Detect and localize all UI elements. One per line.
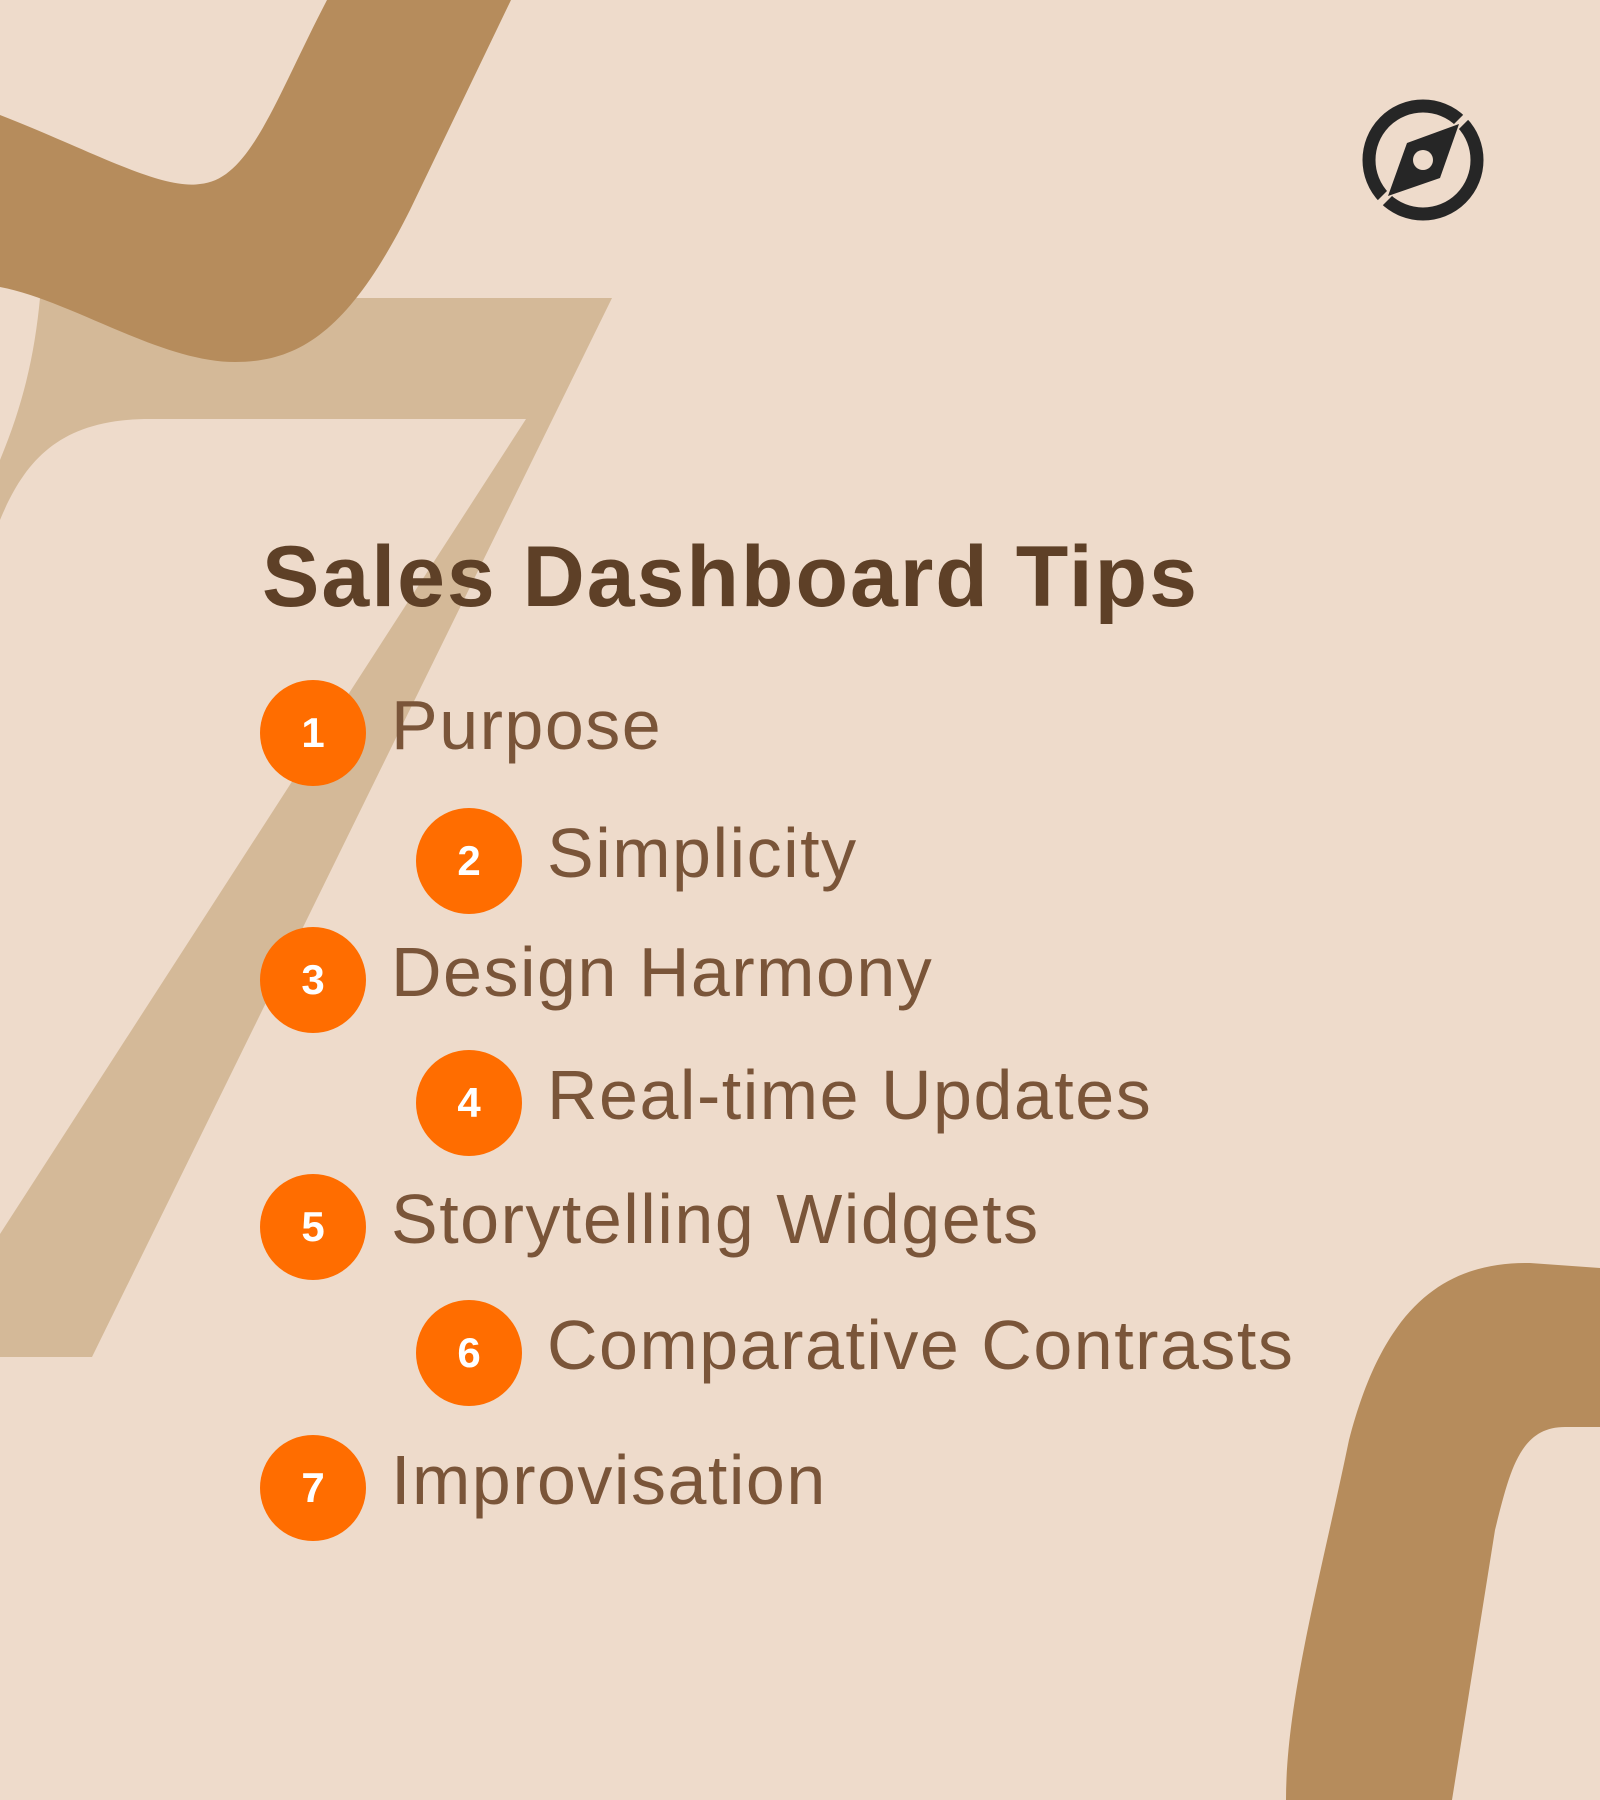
item 7 — [260, 1435, 827, 1541]
text: Real-time Updates — [547, 1056, 1152, 1134]
text: 4 — [457, 1079, 481, 1126]
item 4 — [416, 1050, 1152, 1156]
text: Storytelling Widgets — [391, 1180, 1040, 1258]
text: Improvisation — [391, 1441, 827, 1519]
item 6 — [416, 1300, 1294, 1406]
text: 2 — [457, 837, 481, 884]
text: 5 — [301, 1203, 325, 1250]
text: 6 — [457, 1329, 481, 1376]
item 5 — [260, 1174, 1040, 1280]
decorative top-left curve — [0, 0, 511, 362]
decorative bottom-right curve — [1286, 1263, 1600, 1800]
item 3 — [260, 927, 933, 1033]
text: Design Harmony — [391, 933, 933, 1011]
text: Simplicity — [547, 814, 858, 892]
item 2 — [416, 808, 858, 914]
decorative seven shape — [0, 298, 612, 1357]
text: Purpose — [391, 686, 662, 764]
text: 1 — [301, 709, 325, 756]
icon: compass — [1362, 100, 1484, 220]
title: Sales Dashboard Tips — [262, 529, 1199, 625]
text: 7 — [301, 1464, 325, 1511]
text: 3 — [301, 956, 325, 1003]
text: Comparative Contrasts — [547, 1306, 1294, 1384]
item 1 — [260, 680, 662, 786]
